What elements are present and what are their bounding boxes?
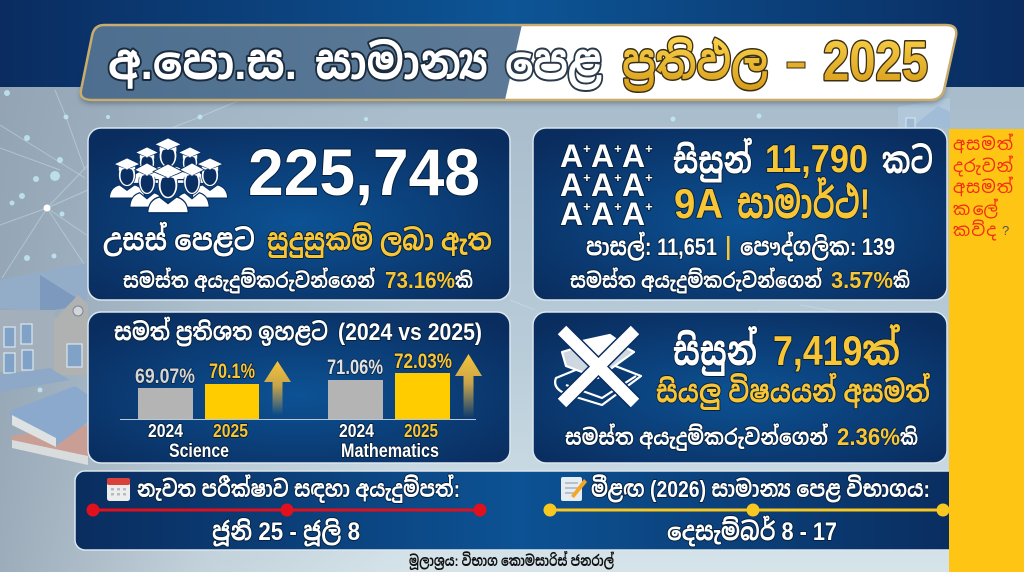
heading line 2: සාමාර්ථ! [737,176,870,227]
next exam dates: දෙසැම්බර් 8 - 17 [667,515,837,547]
subheading: සුදුසුකම් ලබා ඇත [267,221,492,258]
side note text: ? [1002,223,1009,238]
icon: A+ grid: + [614,141,622,156]
heading line 2: 9A [674,180,723,227]
percentage line: කි [455,269,473,293]
icon: graduates group [109,138,228,213]
heading line 1 [673,323,901,376]
panel: students qualified [88,128,510,300]
percentage line: 73.16% [385,267,455,293]
icon: A+ grid: + [645,141,653,156]
icon: A+ grid: + [645,170,653,185]
illustration: stacked books left [10,386,88,465]
source line: මූලාශ්‍රය: විභාග කොමසාරිස් ජනරාල් [409,551,614,570]
reapplication dates: ජූනි 25 - ජූලි 8 [212,518,360,547]
title text [108,29,928,92]
icon: A+ grid: A [622,196,645,232]
bar chart: 72.03% [394,350,452,373]
bar chart: 70.1% [209,360,255,383]
side note text: අසමත් [953,176,1014,197]
bar chart: 69.07% [135,365,195,388]
red timeline [86,504,486,516]
percentage line: සමස්ත අයැදුම්කරුවන්ගෙන් [565,423,828,451]
icon: A+ grid: + [645,199,653,214]
percentage line: 3.57% [831,267,893,293]
icon: A+ grid: A [591,196,614,232]
heading line 2: සියලු විෂයයන් අසමත් [656,372,930,410]
bar chart: 71.06% [327,356,383,379]
big number: 225,748 [248,135,480,209]
percentage line: 2.36% [837,424,900,451]
bar chart: 2025 [213,421,248,441]
icon: A+ grid: + [583,170,591,185]
icon: A+ grid: A [622,167,645,203]
heading line 1: කට [882,140,933,181]
side note text [953,133,1014,240]
heading line 1 [673,137,933,183]
side note text: කලේ [953,199,999,220]
icon: memo [561,477,587,501]
bar chart: 2025 [404,421,438,441]
yellow timeline [544,504,950,516]
side note text: දරුවන් [953,155,1014,176]
percentage line: සමස්ත අයැදුම්කරුවන්ගෙන් [123,267,375,294]
title text: අ.පො.ස. [108,37,297,90]
heading line 1: සිසුන් [673,325,758,376]
school and private split: පාසල්: 11,651 [586,231,717,261]
school and private split: පෞද්ගලික: 139 [740,231,895,261]
title text: සාමාන්‍ය [315,37,488,90]
subheading [103,221,492,258]
title text: ප්‍රතිඵල [622,37,768,92]
title text: පෙළ [505,37,602,91]
title text: 2025 [823,29,928,92]
heading line 1: 7,419ක් [773,323,901,374]
side note text: අසමත් [953,133,1014,154]
subheading: උසස් පෙළට [103,221,255,257]
icon: crossed books [555,330,641,405]
icon: mathematics up arrow [455,354,482,418]
school and private split [586,231,895,261]
icon: A+ grid: + [614,170,622,185]
icon: A+ grid: A [591,138,614,174]
icon: A+ grid [560,138,653,232]
next exam heading: මීළඟ (2026) සාමාන්‍ය පෙළ විභාගය: [591,474,930,503]
icon: A+ grid: A [622,138,645,174]
chart heading [114,316,482,346]
chart heading: සමත් ප්‍රතිශත ඉහළට [114,316,328,346]
percentage line: කි [893,269,910,293]
bar chart [120,350,476,462]
illustration: school building left [0,263,88,392]
panel: failed all subjects [533,312,947,463]
chart heading: (2024 vs 2025) [338,319,482,346]
icon: calendar [107,478,130,501]
percentage line: කි [900,425,918,450]
heading line 1: 11,790 [765,138,868,181]
reapplication heading: නැවත පරීක්ෂාව සඳහා අයැදුම්පත්: [137,474,460,503]
heading line 2 [674,176,870,227]
icon: A+ grid: A [591,167,614,203]
icon: science up arrow [264,361,291,415]
icon: A+ grid: + [583,141,591,156]
bar chart: 2024 [339,421,374,441]
heading line 1: සිසුන් [673,137,753,183]
bar chart: Mathematics [341,441,439,462]
icon: A+ grid: A [560,138,583,174]
icon: A+ grid: A [560,196,583,232]
icon: A+ grid: + [583,199,591,214]
side note panel [949,129,1024,572]
panel: key dates [75,471,960,550]
bar chart: Science [169,441,229,462]
bar chart: 2024 [148,421,183,441]
top navy band [0,0,1024,87]
panel: 9A achievers [533,128,947,300]
icon: A+ grid: A [560,167,583,203]
panel: pass rate comparison [88,312,510,463]
illustration: building top right [898,98,950,128]
title banner [70,20,970,110]
icon: A+ grid: + [614,199,622,214]
side note text: කව්ද [953,220,997,240]
percentage line: සමස්ත අයැදුම්කරුවන්ගෙන් [570,267,822,294]
